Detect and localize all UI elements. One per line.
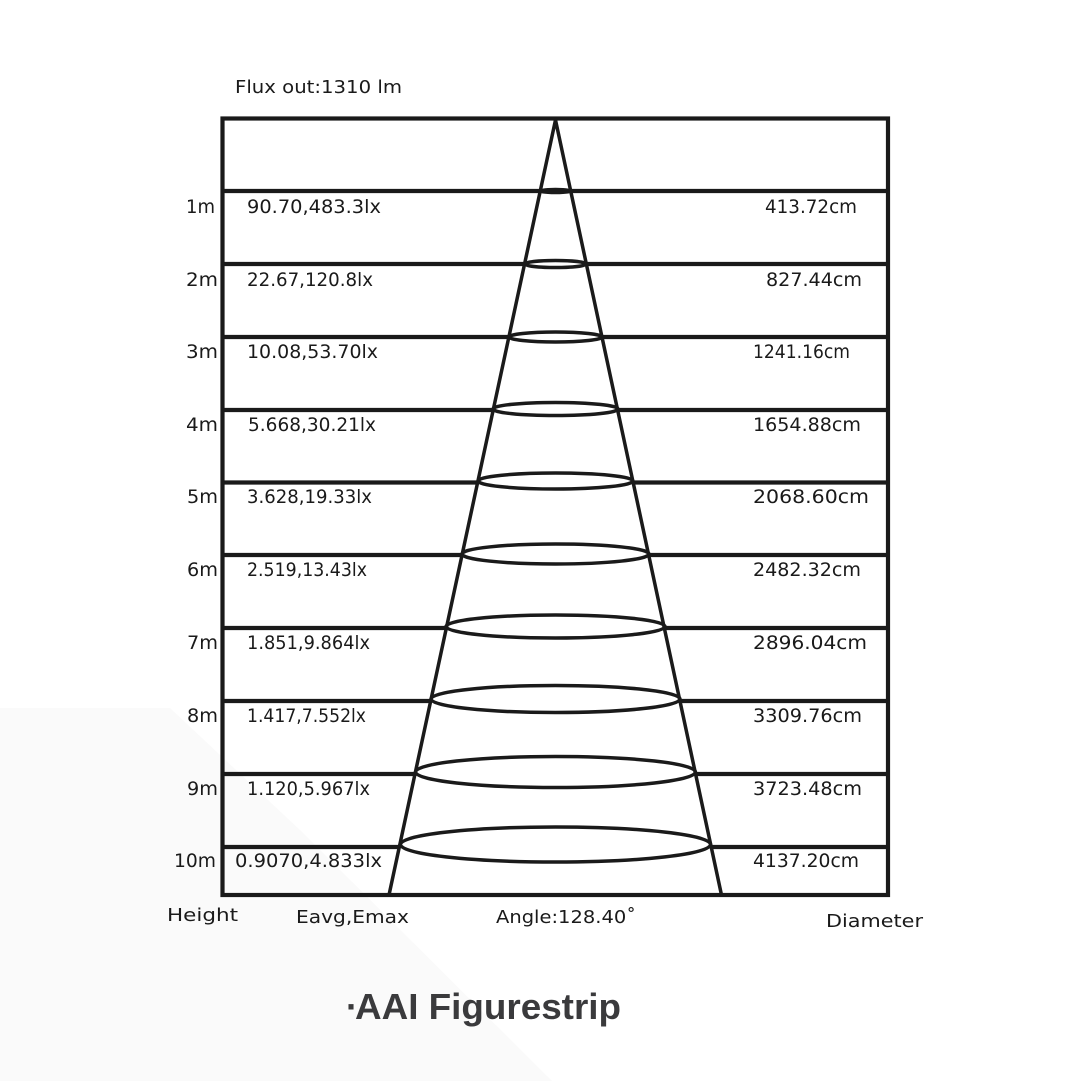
diameter column: 2482.32cm [753,559,861,581]
illuminance column: 90.70,483.3lx [247,196,381,218]
height column: 8m [187,705,218,727]
diameter column: 1654.88cm [753,414,861,436]
height column: 3m [186,341,218,363]
height column: 5m [187,486,218,508]
axis label: height: Height [167,906,238,926]
light cone edges [389,120,722,895]
diameter column: 413.72cm [765,196,857,218]
illuminance column: 2.519,13.43lx [247,559,367,581]
illuminance column: 5.668,30.21lx [248,414,376,436]
chart: light cone diagram [222,118,888,895]
height column: 10m [174,850,216,872]
diameter column: 4137.20cm [753,850,859,872]
height column: 9m [187,778,218,800]
beam ellipses [400,190,710,862]
diameter column: 827.44cm [766,269,862,291]
height column: 2m [186,269,218,291]
diameter column: 3723.48cm [753,778,862,800]
title: AAI Figurestrip [355,986,621,1027]
illuminance column: 1.120,5.967lx [247,778,370,800]
diameter column [753,196,869,872]
diameter column: 3309.76cm [753,705,862,727]
height column: 1m [186,196,215,218]
diameter column: 2896.04cm [753,632,867,654]
height column: 7m [187,632,218,654]
diameter column: 2068.60cm [753,486,869,508]
axis label: beam angle: Angle:128.40˚ [496,907,636,928]
background: pale grey corner shape [0,708,552,1081]
height column: 4m [186,414,218,436]
illuminance column: 22.67,120.8lx [247,269,373,291]
illuminance column: 10.08,53.70lx [247,341,378,363]
height divider lines [222,191,888,847]
illuminance column [235,196,382,872]
axis label: illuminance: Eavg,Emax [296,908,409,928]
flux label: Flux out:1310 lm [235,78,402,98]
illuminance column: 1.851,9.864lx [247,632,370,654]
illuminance column: 0.9070,4.833lx [235,850,382,872]
axis label: diameter: Diameter [826,912,924,932]
title: · [346,986,358,1027]
diameter column: 1241.16cm [753,341,850,363]
illuminance column: 3.628,19.33lx [247,486,372,508]
height column: 6m [187,559,218,581]
table frame [222,118,888,895]
illuminance column: 1.417,7.552lx [247,705,366,727]
height column [174,196,218,872]
